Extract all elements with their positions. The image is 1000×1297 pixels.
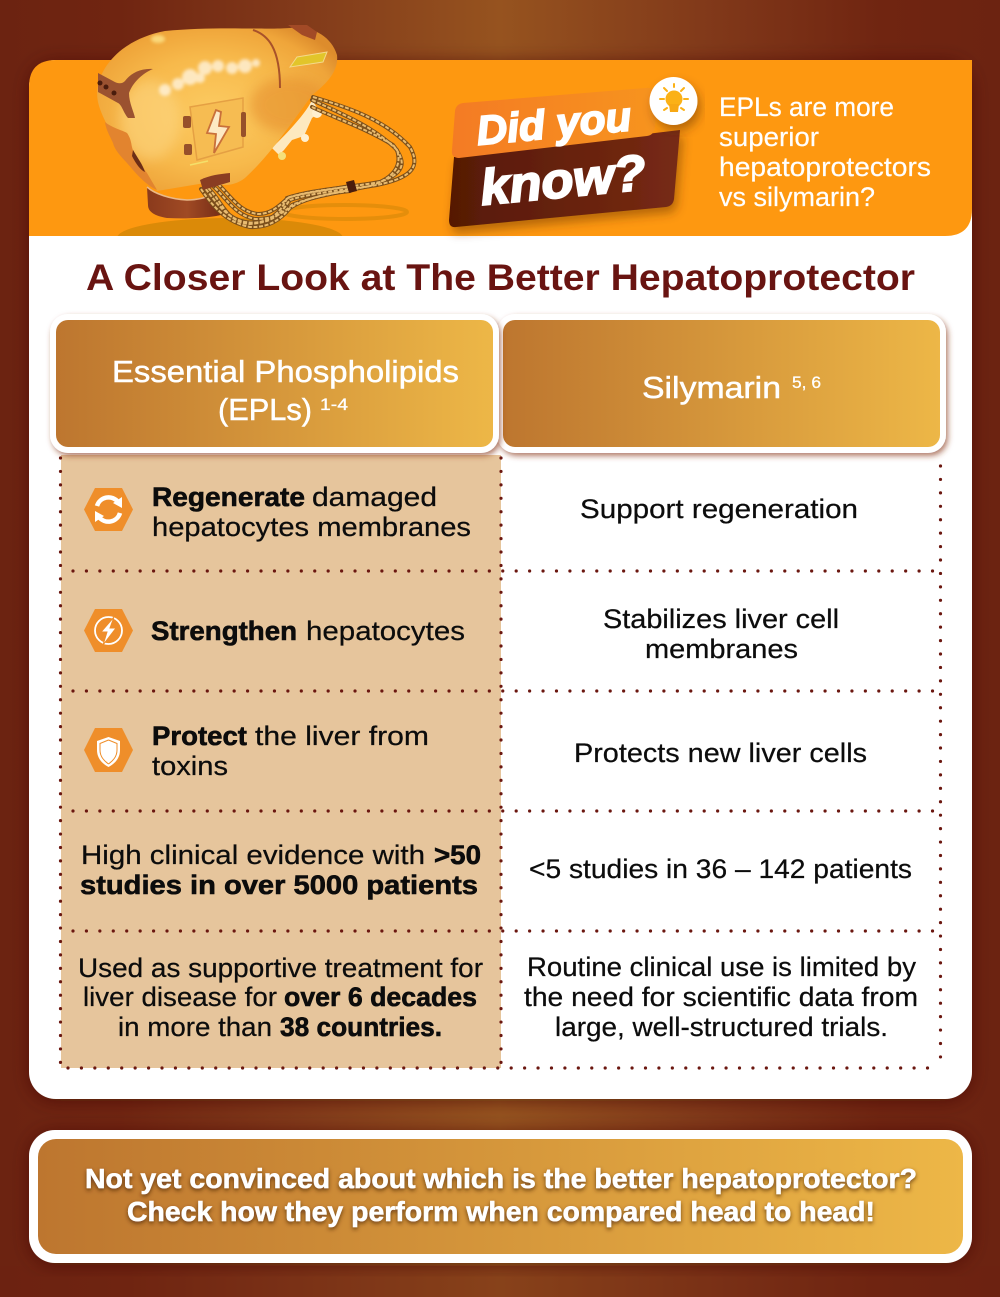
- did you: Did you: [474, 93, 633, 154]
- orange header band: [29, 60, 972, 236]
- column header: Silymarin: [497, 314, 946, 453]
- row 2: strengthen: hepatocytes: [306, 616, 465, 646]
- column header: Essential Phospholipids: [50, 314, 499, 453]
- row 4: clinical evidence: High clinical evidence with: [81, 840, 425, 870]
- row 1: regenerate: hepatocytes membranes: [152, 512, 471, 542]
- bottom call to action: Check how they perform when compared head to head!: [127, 1196, 875, 1227]
- icon: lightning bolt: [84, 609, 133, 652]
- row 5: clinical use: liver disease for: [83, 982, 277, 1012]
- row 1: regenerate: [84, 482, 858, 542]
- intro question: vs silymarin?: [719, 182, 875, 212]
- bottom call to action: [29, 1130, 972, 1263]
- column header: Essential Phospholipids: 1-4: [320, 395, 348, 414]
- row 2: strengthen: Stabilizes liver cell: [603, 604, 839, 634]
- cables: [201, 97, 414, 227]
- slot: [290, 52, 327, 67]
- row 5: clinical use: 38 countries.: [280, 1012, 442, 1042]
- icon: shield: [84, 728, 133, 772]
- bottom call to action: Not yet convinced about which is the better hepatoprotector?: [85, 1163, 917, 1194]
- row 2: strengthen: [84, 604, 839, 664]
- row 3: protect: [84, 721, 867, 781]
- side panel: [105, 122, 157, 190]
- cable port: [200, 173, 230, 190]
- badge dark panel: [449, 130, 680, 227]
- row 5: clinical use: large, well-structured trials.: [555, 1012, 888, 1042]
- row 5: clinical use: [78, 952, 918, 1042]
- bolt icon on liver: [207, 110, 229, 153]
- row 1: regenerate: Support regeneration: [580, 494, 858, 524]
- top cap: [288, 25, 317, 40]
- liver highlight: [159, 59, 260, 96]
- main white card: [29, 25, 972, 1099]
- row 3: protect: toxins: [152, 751, 228, 781]
- liver stand: [147, 187, 227, 218]
- milk drips: [272, 100, 320, 155]
- liver body: [97, 27, 337, 191]
- intro question: EPLs are more: [719, 92, 894, 122]
- illustration: robotic liver: [97, 25, 414, 258]
- row 4: clinical evidence: studies in over 5000 patients: [80, 870, 478, 900]
- fin panel: [98, 69, 153, 118]
- liver seam: [253, 30, 280, 88]
- row 5: clinical use: the need for scientific data from: [524, 982, 918, 1012]
- row 5: clinical use: Used as supportive treatment for: [78, 953, 483, 983]
- intro question: hepatoprotectors: [719, 152, 931, 182]
- column header: Silymarin: Silymarin: [642, 370, 781, 405]
- icon: light bulb: [650, 77, 698, 125]
- intro question: superior: [719, 122, 819, 152]
- row 5: clinical use: over 6 decades: [284, 982, 477, 1012]
- EPL column background: [61, 455, 501, 1068]
- row 5: clinical use: Routine clinical use is limited by: [527, 952, 917, 982]
- row 3: protect: Protect: [152, 721, 247, 751]
- row 4: clinical evidence: [80, 840, 912, 900]
- badge orange panel: [452, 88, 657, 158]
- liver shading: [120, 35, 330, 160]
- icon: regenerate arrows: [84, 488, 133, 531]
- battery window: [190, 98, 243, 160]
- comparison table: [50, 314, 946, 1068]
- row 4: clinical evidence: >50: [434, 840, 481, 870]
- intro question: [719, 92, 931, 212]
- row 5: clinical use: in more than: [118, 1012, 272, 1042]
- title: A Closer Look at The Better Hepatoprotector: [86, 257, 915, 298]
- row 2: strengthen: membranes: [645, 634, 798, 664]
- row 1: regenerate: Regenerate: [152, 482, 305, 512]
- column header: Essential Phospholipids: (EPLs): [218, 392, 312, 427]
- column header: Essential Phospholipids: Essential Phospholipids: [112, 354, 459, 389]
- did you know badge: [449, 77, 698, 227]
- know: know?: [478, 144, 648, 216]
- row 1: regenerate: damaged: [312, 482, 437, 512]
- row 3: protect: the liver from: [255, 721, 429, 751]
- row 2: strengthen: Strengthen: [151, 616, 297, 646]
- column header: Silymarin: 5, 6: [792, 373, 821, 392]
- row 3: protect: Protects new liver cells: [574, 738, 867, 768]
- row 4: clinical evidence: <5 studies in 36 – 142 patients: [529, 854, 912, 884]
